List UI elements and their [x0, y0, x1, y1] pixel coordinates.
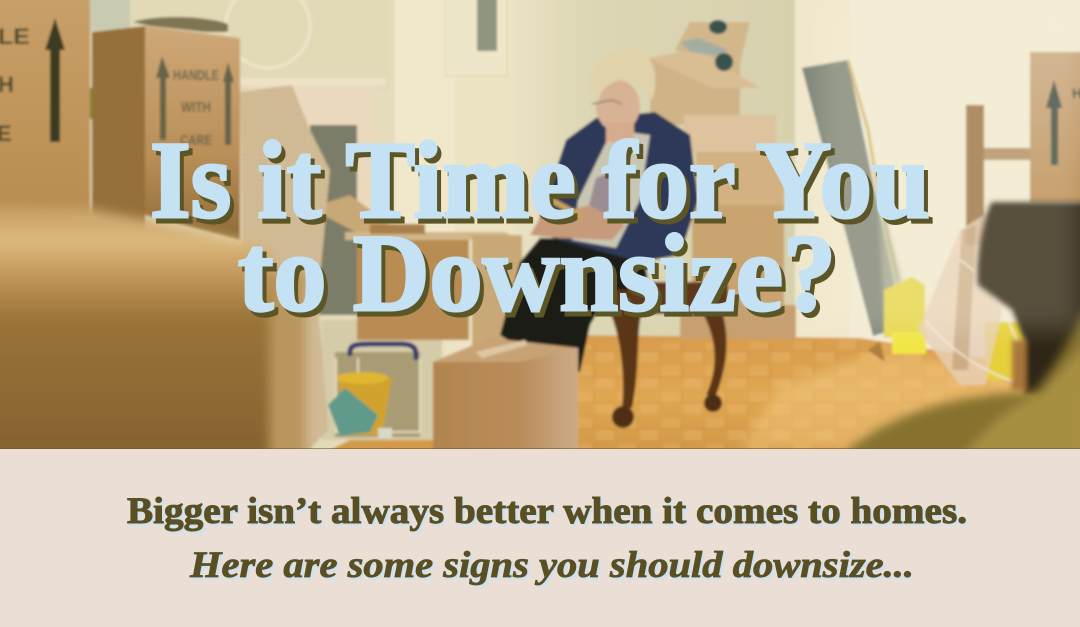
handle with care box: WITH [181, 99, 211, 116]
foreground chair arm [841, 307, 1080, 449]
chair legs [610, 312, 727, 408]
clear plastic bin [322, 320, 442, 440]
chair seat [606, 282, 728, 314]
hands and book [530, 205, 625, 240]
wrapped chair right [918, 105, 1030, 385]
subtitle italic line: Here are some signs you should downsize... [191, 547, 916, 588]
title shadow [154, 124, 934, 339]
handle with care box: HANDLE [173, 67, 219, 84]
yellow crates [884, 277, 1025, 380]
centre cardboard box [433, 338, 578, 460]
foreground blurred box [0, 205, 306, 460]
right box [1030, 52, 1080, 202]
warm haze [814, 52, 1080, 342]
bubble wrap [240, 85, 330, 460]
hair [590, 48, 655, 104]
subtitle: Bigger isn’t always better when it comes to homes. [127, 491, 967, 532]
handle with care box [92, 17, 240, 240]
glasses [592, 100, 622, 104]
handle with care box: CARE [180, 132, 212, 149]
rolled carpet [802, 60, 915, 336]
title face [150, 119, 930, 334]
floor [330, 334, 1037, 449]
title face: Is it Time for You [150, 119, 930, 241]
open box behind [310, 195, 522, 345]
title shadow: to Downsize? [242, 217, 840, 339]
trousers [500, 238, 650, 372]
subtitle italic line: Here are some signs you should downsize... [189, 545, 914, 586]
dark chair foreground right [977, 202, 1080, 395]
woman seated [500, 48, 728, 428]
subtitle: Bigger isn’t always better when it comes to homes. [129, 493, 969, 534]
face [596, 80, 640, 132]
blouse [572, 130, 650, 248]
title shadow: Is it Time for You [154, 124, 934, 246]
far left tall box [0, 0, 90, 215]
photo: woman sorting boxes in a room [0, 0, 1080, 460]
back stack of boxes [648, 20, 796, 339]
picture frame behind wrap [310, 125, 362, 315]
plant [88, 86, 94, 120]
cardigan [535, 112, 698, 262]
room wall [89, 0, 1080, 449]
title [150, 119, 934, 339]
title face: to Downsize? [238, 212, 836, 334]
